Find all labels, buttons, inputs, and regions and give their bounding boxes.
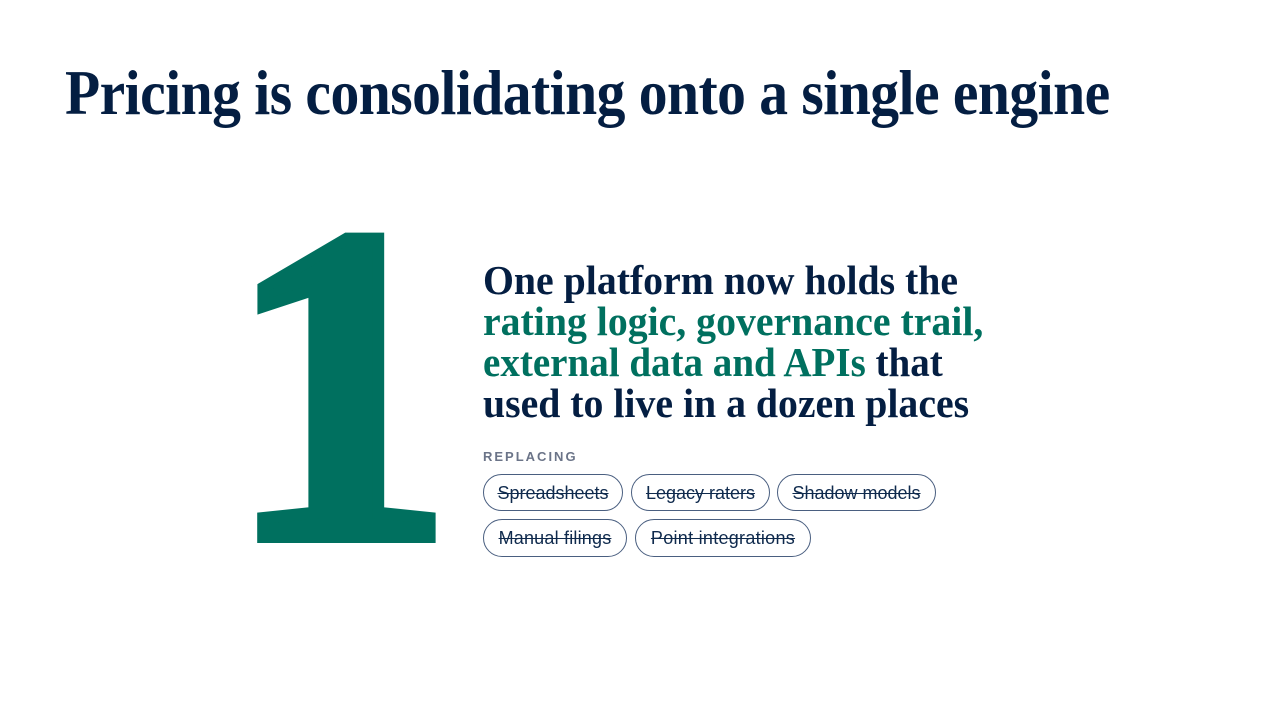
pill: Point integrations: Point integrations xyxy=(651,528,795,548)
statement line 3: external data and APIs that xyxy=(483,339,943,385)
pill: Point integrations xyxy=(635,519,811,557)
pill: Legacy raters xyxy=(631,474,770,511)
pill: Legacy raters: Legacy raters xyxy=(646,483,755,503)
big numeral one: 1 xyxy=(227,134,453,635)
statement text xyxy=(483,257,983,426)
pill: Spreadsheets: Spreadsheets xyxy=(497,483,609,503)
replacing label: REPLACING xyxy=(483,449,578,464)
pill: Manual filings: Manual filings xyxy=(499,528,611,548)
statement line 4: used to live in a dozen places xyxy=(483,380,969,426)
pill: Shadow models: Shadow models xyxy=(792,483,921,503)
pill: Manual filings xyxy=(483,519,627,557)
statement line 2: rating logic, governance trail, xyxy=(483,298,983,344)
title: Pricing is consolidating onto a single engine xyxy=(65,57,1110,128)
pill: Shadow models xyxy=(777,474,936,511)
statement line 1: One platform now holds the xyxy=(483,257,958,303)
pill: Spreadsheets xyxy=(483,474,623,511)
